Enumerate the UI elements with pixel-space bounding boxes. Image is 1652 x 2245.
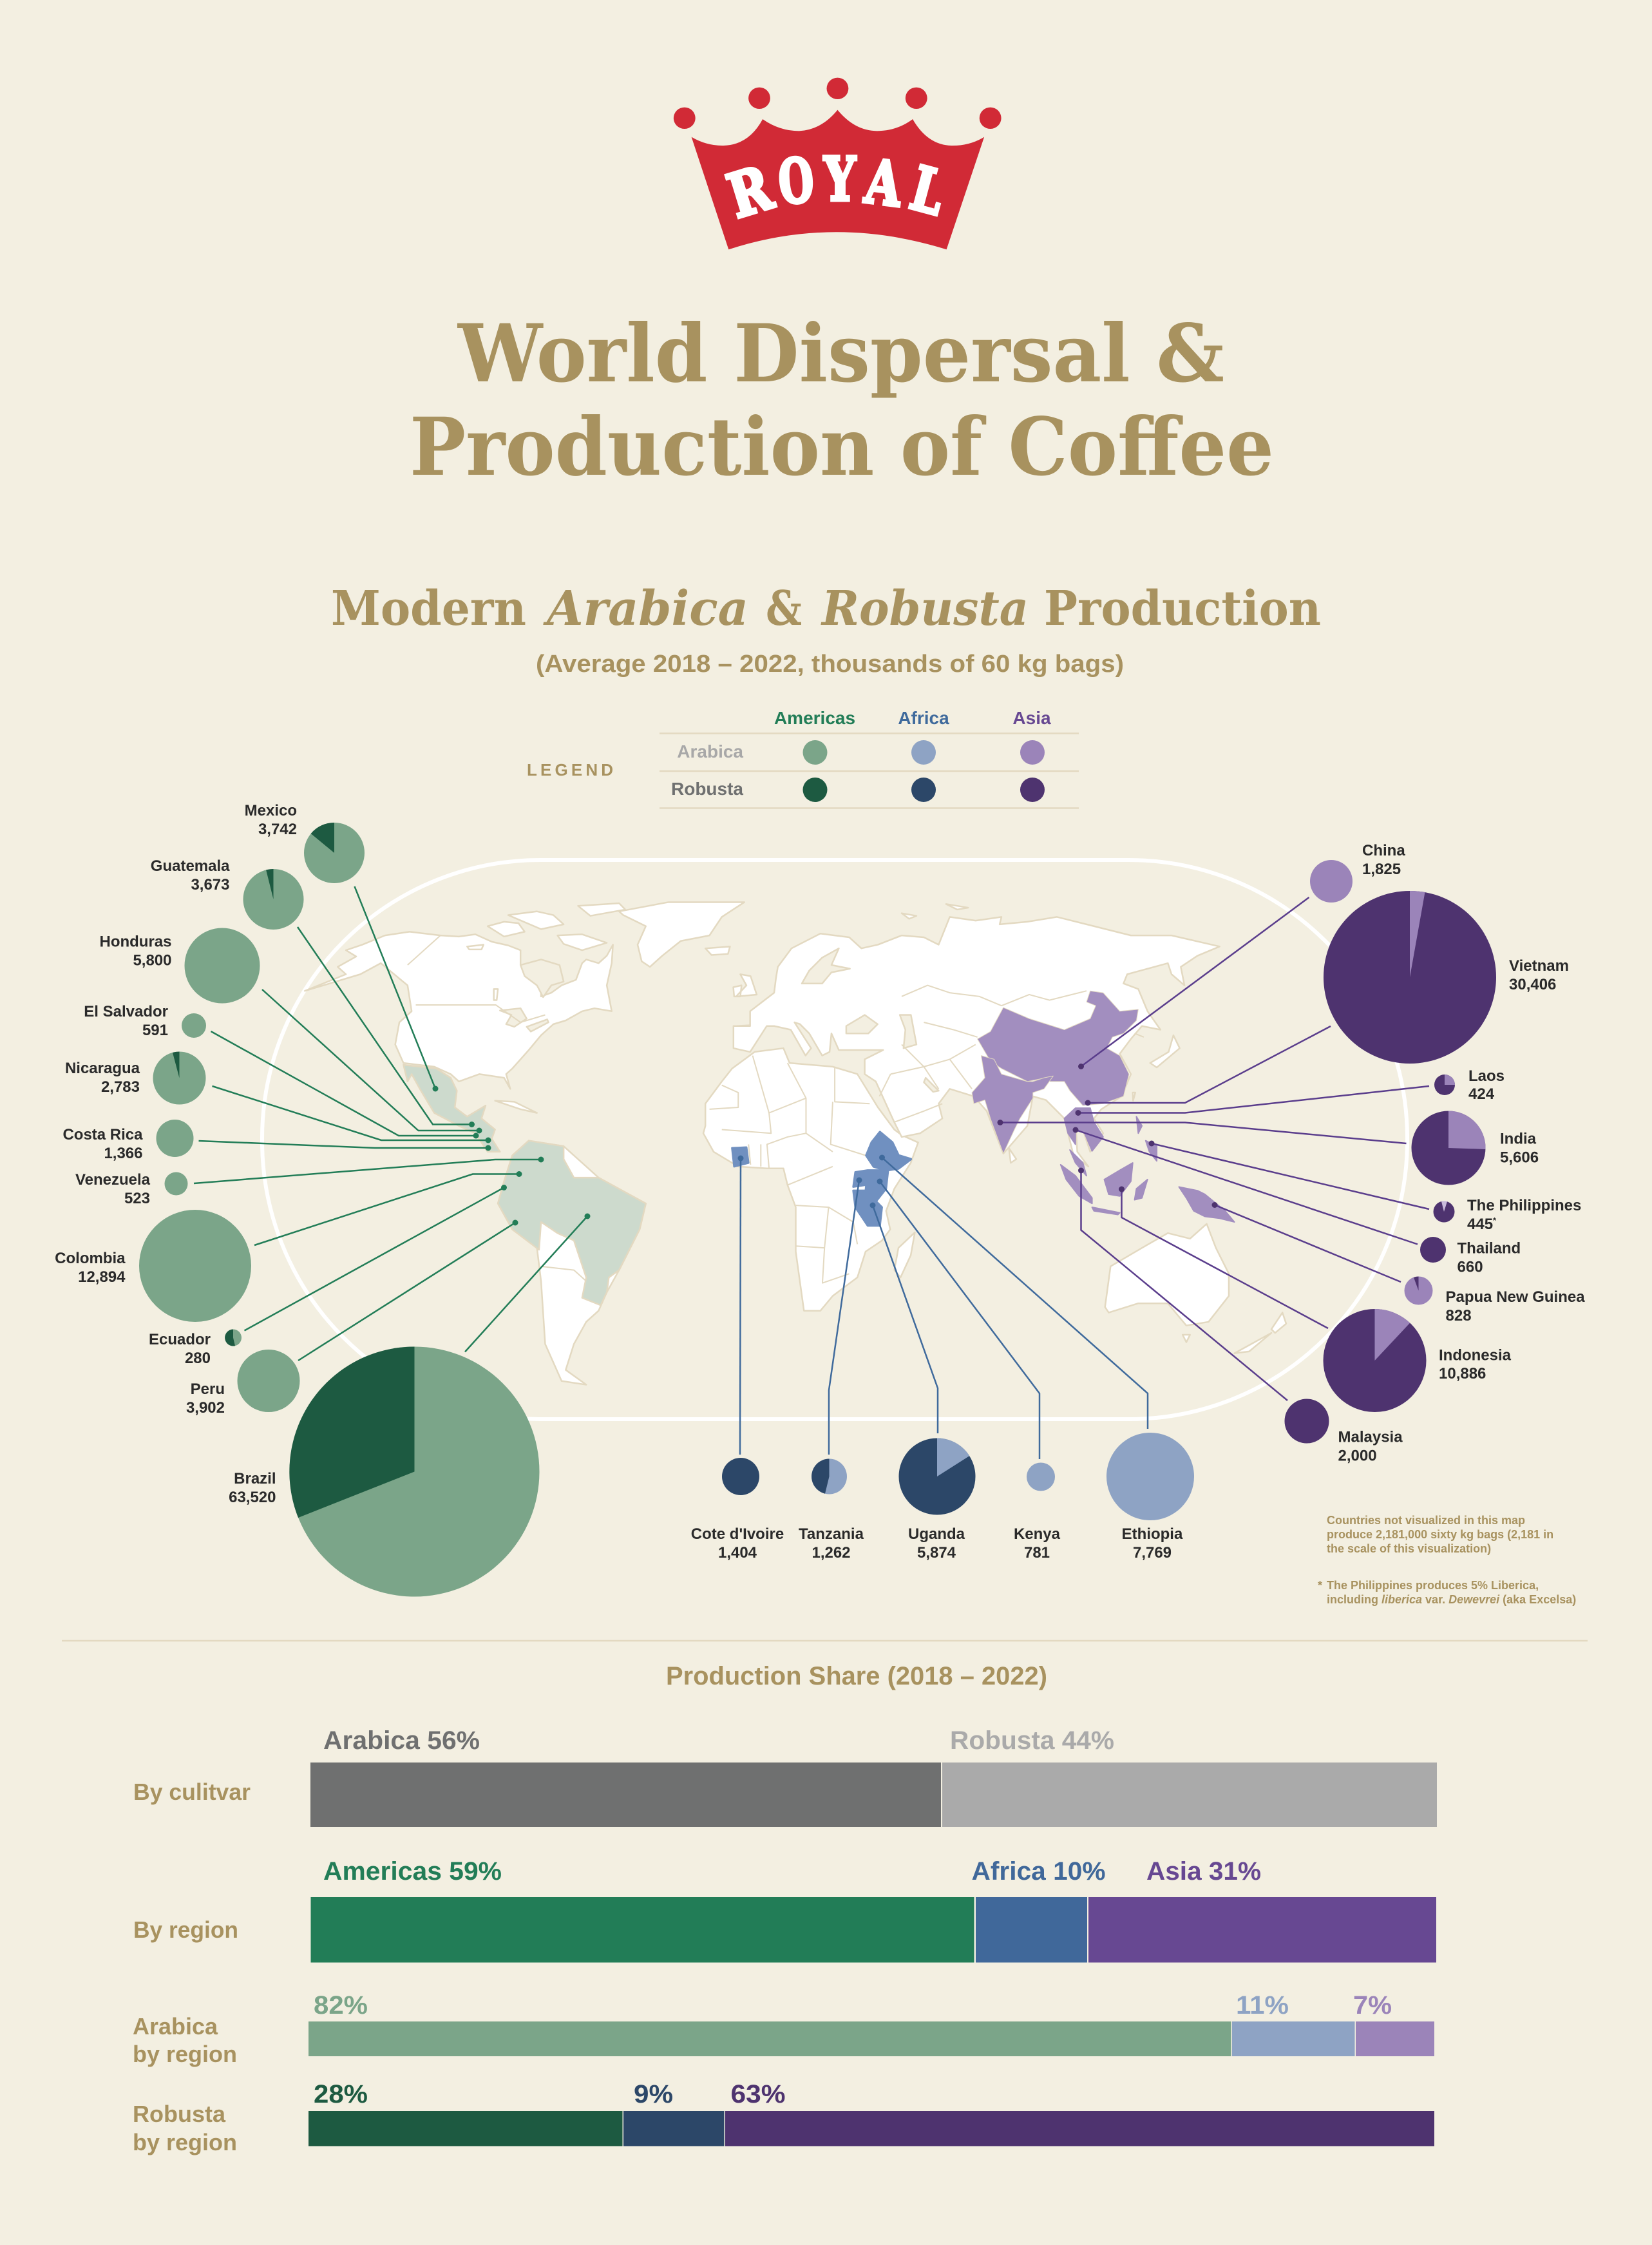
- labels: Asia: 445: [1467, 1216, 1493, 1233]
- pie: Kenya: [1027, 1462, 1055, 1491]
- pie: Tanzania: [812, 1458, 847, 1495]
- pie: Brazil: [289, 1346, 540, 1596]
- logo: Royal crown: O: [775, 144, 817, 218]
- labels: Asia: China: [1362, 842, 1405, 859]
- labels: Americas: 3,742: [258, 821, 297, 838]
- bar chart: Robusta by region: 9%: [634, 2080, 673, 2108]
- labels: Americas: 1,366: [104, 1145, 143, 1162]
- pie: Costa Rica: [156, 1120, 193, 1157]
- labels: Asia: Papua New Guinea: [1445, 1288, 1585, 1306]
- labels: Americas: [55, 802, 297, 1506]
- bar chart: by region: [133, 1857, 1436, 1962]
- labels: Asia: Thailand: [1457, 1239, 1521, 1257]
- labels: Americas: 5,800: [133, 952, 171, 969]
- map: Eurasia and Oceania: [734, 904, 1286, 1353]
- footnote: The Philippines: The Philippines produces 5% Liberica,: [1327, 1579, 1539, 1592]
- legend: Robusta: [671, 779, 743, 799]
- pie: The Philippines: [1434, 1201, 1454, 1223]
- labels: Africa: Cote d'Ivoire: [691, 1525, 784, 1543]
- labels: Africa: Tanzania: [799, 1525, 864, 1543]
- pie: Malaysia: [1284, 1399, 1329, 1443]
- bar chart: Arabica by region: [133, 1991, 1434, 2067]
- bar chart: by cultivar: Arabica 56%: [323, 1726, 480, 1755]
- labels: Asia: 660: [1457, 1259, 1483, 1275]
- pie: Colombia: [139, 1210, 251, 1322]
- labels: Americas: Guatemala: [151, 857, 230, 875]
- section heading: Modern Arabica & Robusta Production: Arabica: [543, 581, 748, 636]
- bar chart: Robusta by region: [133, 2080, 1434, 2155]
- bar chart: Robusta by region: by region: [133, 2129, 237, 2155]
- labels: Americas: Mexico: [245, 802, 297, 819]
- labels: Americas: 591: [142, 1022, 168, 1039]
- bar chart: Arabica by region: 7%: [1353, 1991, 1392, 2020]
- footnote: The Philippines: including liberica var. Dewevrei (aka Excelsa): [1327, 1593, 1576, 1606]
- footnote: countries not visualized: produce 2,181,000 sixty kg bags (2,181 in: [1327, 1528, 1553, 1541]
- labels: Americas: 63,520: [229, 1489, 276, 1506]
- pie: Guatemala: [243, 869, 304, 930]
- footnote: countries not visualized: [1327, 1514, 1553, 1555]
- labels: Asia: 10,886: [1439, 1365, 1486, 1382]
- pie: Ecuador: [225, 1330, 242, 1346]
- map frame: [262, 860, 1407, 1419]
- bar chart: Arabica by region: Arabica: [133, 2013, 218, 2040]
- footnote: countries not visualized: the scale of this visualization): [1327, 1542, 1491, 1555]
- labels: Asia: [1338, 842, 1585, 1465]
- pie: Papua New Guinea: [1404, 1277, 1432, 1305]
- bar chart: Arabica by region: 82%: [314, 1991, 368, 2020]
- labels: Americas: 280: [185, 1350, 211, 1367]
- labels: Americas: 3,902: [186, 1399, 225, 1417]
- footnote: countries not visualized: Countries not visualized in this map: [1327, 1514, 1525, 1527]
- labels: Asia: Vietnam: [1509, 957, 1569, 975]
- labels: Asia: *: [1493, 1216, 1497, 1225]
- labels: Asia: 2,000: [1338, 1447, 1377, 1465]
- world map: [305, 902, 1286, 1385]
- footnote: The Philippines: *: [1318, 1579, 1322, 1592]
- labels: Americas: Honduras: [99, 933, 171, 951]
- logo: Royal crown: Y: [823, 144, 857, 215]
- title: World Dispersal &: [457, 307, 1224, 401]
- pie: Peru: [237, 1350, 300, 1412]
- leader lines: Africa: [738, 1154, 1148, 1459]
- subtitle: (Average 2018 – 2022, thousands of 60 kg bags): [536, 651, 1124, 678]
- labels: Americas: Colombia: [55, 1250, 126, 1267]
- pie: Uganda: [899, 1438, 975, 1515]
- title: [410, 307, 1274, 494]
- labels: Asia: 5,606: [1500, 1149, 1539, 1166]
- bar chart: by region: By region: [133, 1916, 238, 1943]
- pie: Vietnam: [1324, 891, 1496, 1064]
- section heading: Modern Arabica & Robusta Production: Modern: [331, 581, 526, 636]
- labels: Asia: Indonesia: [1439, 1346, 1512, 1364]
- labels: Africa: 1,262: [812, 1544, 851, 1562]
- pie: Thailand: [1420, 1237, 1446, 1263]
- labels: Americas: Venezuela: [75, 1171, 151, 1189]
- legend: Americas: [774, 708, 855, 728]
- pie: Nicaragua: [153, 1051, 206, 1104]
- legend: Arabica: [677, 741, 743, 761]
- legend: Africa: [898, 708, 949, 728]
- labels: Africa: 5,874: [917, 1544, 956, 1562]
- title: Production of Coffee: [410, 401, 1274, 494]
- labels: Americas: Nicaragua: [65, 1060, 140, 1077]
- labels: Asia: 828: [1445, 1307, 1472, 1324]
- labels: Asia: The Philippines: [1467, 1197, 1581, 1214]
- section heading: Modern Arabica & Robusta Production: Production: [1044, 581, 1321, 636]
- labels: Asia: 30,406: [1509, 976, 1556, 993]
- bar chart: by region: Africa 10%: [971, 1857, 1105, 1886]
- labels: Americas: Costa Rica: [62, 1126, 143, 1143]
- legend: LEGEND: [527, 760, 613, 779]
- pie: Indonesia: [1323, 1309, 1426, 1412]
- logo: Royal crown: L: [904, 153, 952, 229]
- bar chart: Robusta by region: Robusta: [133, 2101, 226, 2127]
- bar chart: by cultivar: By culitvar: [133, 1779, 251, 1805]
- pie: Laos: [1434, 1075, 1455, 1095]
- labels: Africa: [691, 1525, 1183, 1562]
- labels: Americas: Peru: [191, 1380, 225, 1398]
- logo: Royal crown: R: [720, 152, 781, 233]
- labels: Asia: Laos: [1468, 1067, 1505, 1085]
- labels: Americas: 2,783: [101, 1078, 140, 1096]
- pie: India: [1412, 1111, 1486, 1185]
- pie: Ethiopia: [1106, 1433, 1194, 1520]
- labels: Americas: 3,673: [191, 876, 229, 893]
- labels: Asia: India: [1500, 1130, 1537, 1148]
- legend: Asia: [1012, 708, 1051, 728]
- labels: Americas: Brazil: [234, 1470, 276, 1487]
- bar chart: by region: Americas 59%: [323, 1857, 502, 1886]
- legend: [527, 708, 1079, 808]
- labels: Africa: 781: [1024, 1544, 1050, 1562]
- heading: Production Share: Production Share (2018 – 2022): [666, 1662, 1047, 1690]
- labels: Asia: Malaysia: [1338, 1429, 1403, 1446]
- map: Americas and Africa: [305, 902, 918, 1385]
- section heading: Modern Arabica & Robusta Production: &: [766, 581, 802, 636]
- logo: Royal crown: [674, 78, 1002, 249]
- bar chart: by cultivar: [133, 1726, 1437, 1827]
- labels: Africa: 7,769: [1133, 1544, 1172, 1562]
- bar chart: by region: Asia 31%: [1146, 1857, 1261, 1886]
- pie: China: [1310, 860, 1353, 903]
- labels: Americas: El Salvador: [84, 1003, 168, 1020]
- logo: Royal crown: A: [861, 146, 906, 221]
- labels: Asia: 1,825: [1362, 861, 1401, 878]
- bar chart: Arabica by region: 11%: [1236, 1991, 1289, 2020]
- pie: Honduras: [184, 928, 260, 1004]
- bar chart: Robusta by region: 28%: [314, 2080, 368, 2108]
- pie: El Salvador: [182, 1013, 206, 1038]
- bar chart: Arabica by region: by region: [133, 2041, 237, 2067]
- labels: Americas: 523: [124, 1190, 150, 1207]
- footnote: The Philippines: [1318, 1579, 1576, 1606]
- labels: Americas: 12,894: [78, 1268, 126, 1286]
- section heading: Modern Arabica & Robusta Production: Robusta: [821, 581, 1029, 636]
- divider: [62, 1640, 1588, 1641]
- labels: Africa: Uganda: [908, 1525, 965, 1543]
- leader lines: Americas: [194, 886, 590, 1361]
- pie: Mexico: [304, 823, 365, 883]
- leader lines: Asia: [997, 897, 1429, 1400]
- labels: Africa: Ethiopia: [1122, 1525, 1183, 1543]
- bar chart: by cultivar: Robusta 44%: [950, 1726, 1114, 1755]
- pie: Venezuela: [165, 1172, 188, 1196]
- labels: Asia: 424: [1468, 1085, 1495, 1103]
- labels: Africa: Kenya: [1014, 1525, 1061, 1543]
- pie: Cote d'Ivoire: [722, 1458, 759, 1495]
- labels: Americas: Ecuador: [149, 1331, 211, 1348]
- bar chart: Robusta by region: 63%: [730, 2080, 786, 2108]
- section heading: Modern Arabica & Robusta Production: [331, 581, 1321, 636]
- labels: Africa: 1,404: [718, 1544, 757, 1562]
